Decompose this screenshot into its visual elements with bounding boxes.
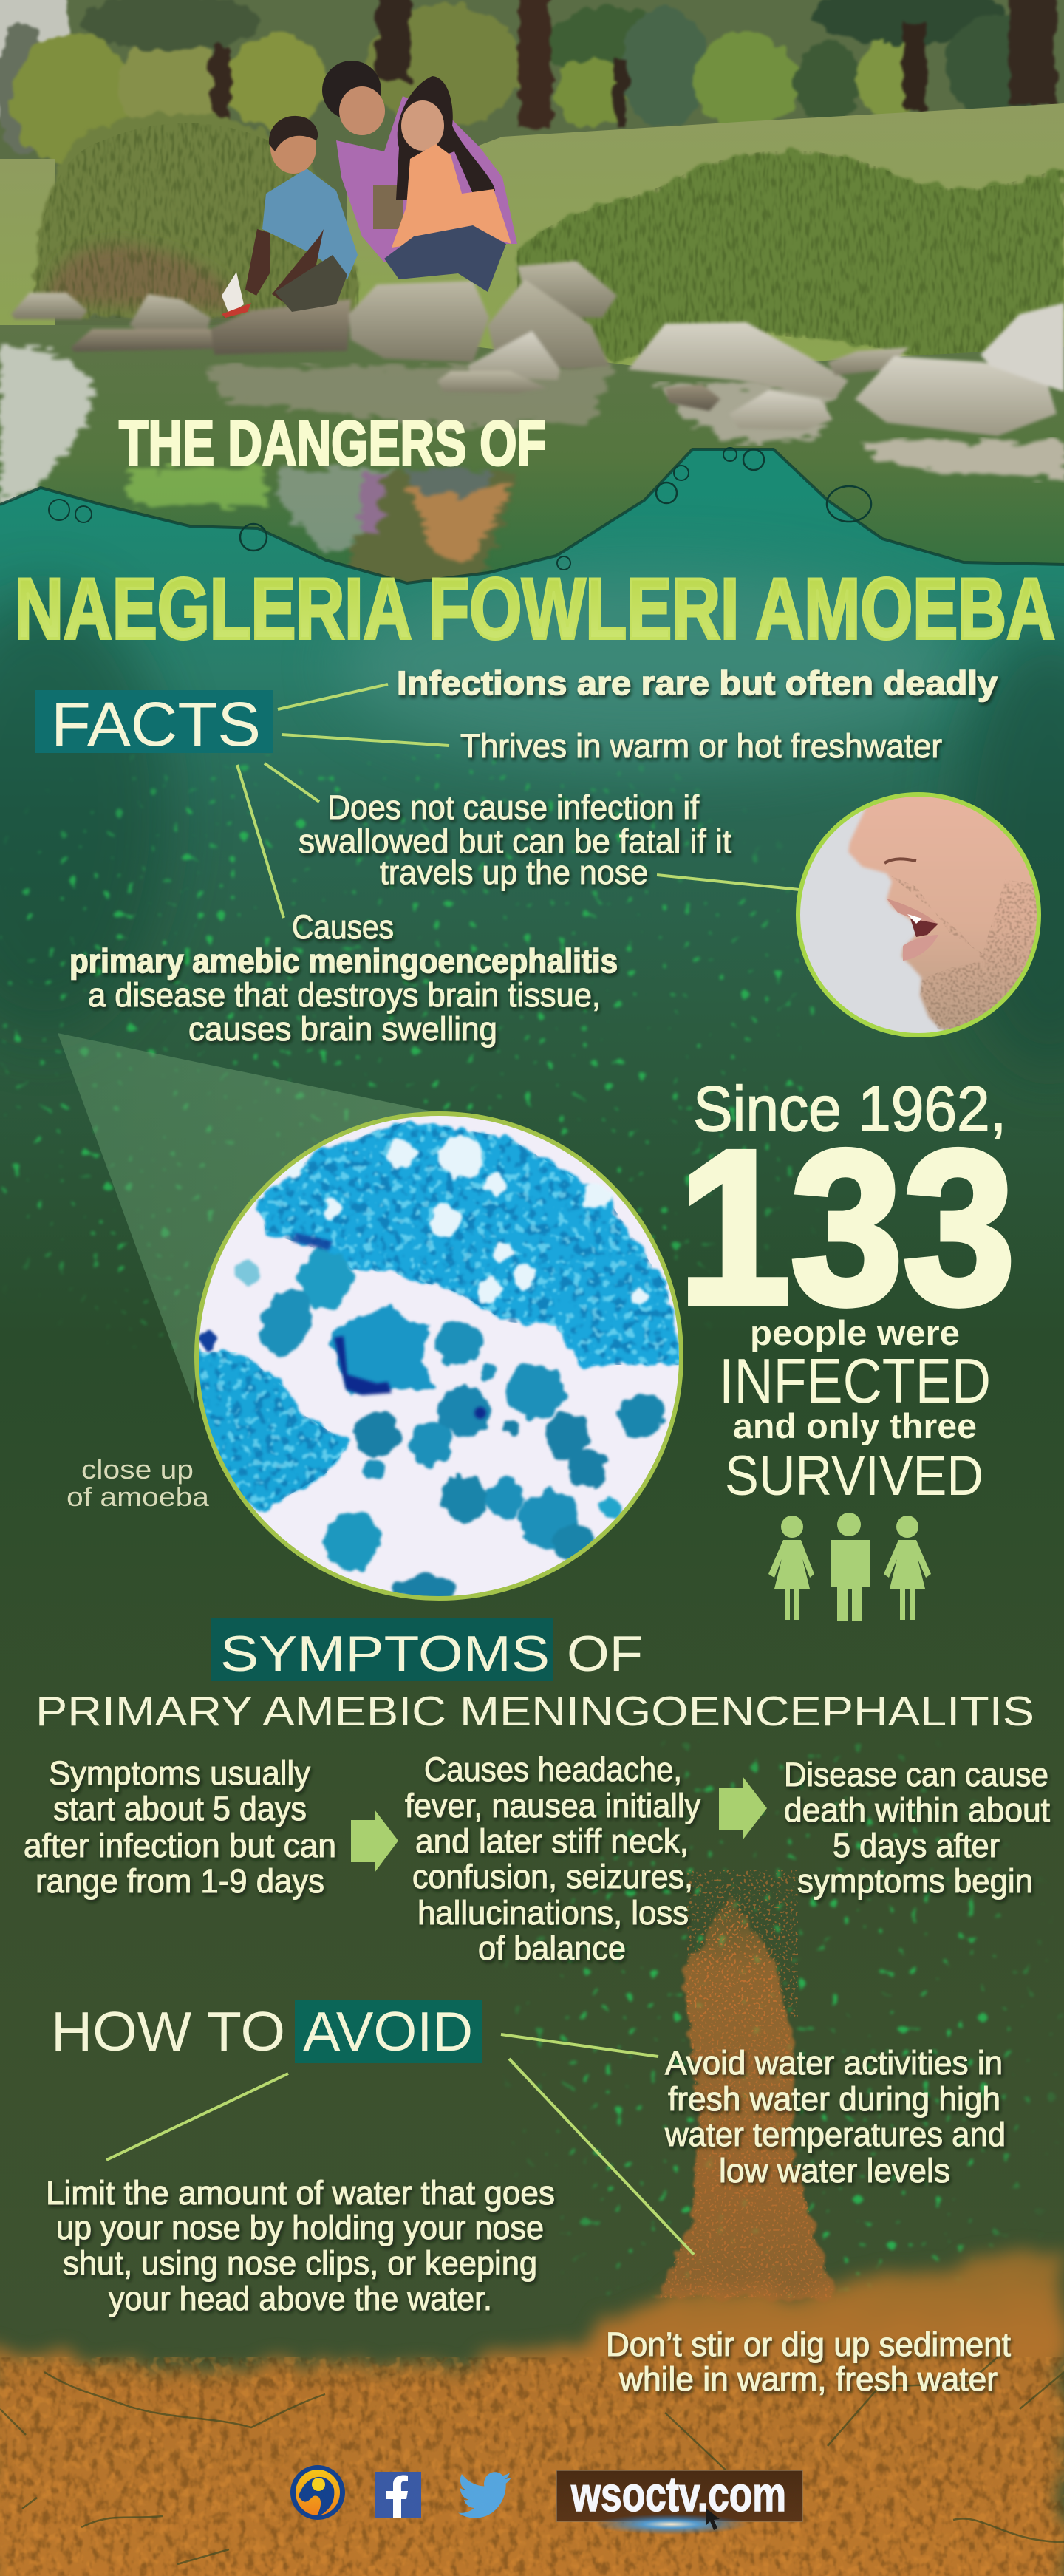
fact: nose: Does not cause infection if	[327, 788, 699, 826]
blue tissue network	[194, 1121, 683, 1510]
symptoms step 3	[784, 1756, 1050, 1900]
dark nuclei	[292, 1233, 486, 1419]
fact: rare but deadly: Infections are rare but often deadly	[397, 664, 998, 702]
tip: water activities: Avoid water activities in	[665, 2044, 1003, 2082]
sediment ground	[0, 2246, 1064, 2576]
reeds right	[517, 151, 1064, 362]
symptoms step 3: symptoms begin	[797, 1862, 1033, 1900]
tip: limit water up nose: your head above the water.	[109, 2280, 492, 2317]
tissue mottling	[194, 1113, 684, 1527]
symptoms step 2: confusion, seizures,	[412, 1858, 693, 1895]
fact: nose: swallowed but can be fatal if it	[299, 822, 732, 860]
icon: facebook	[375, 2472, 421, 2518]
icons: three survivors	[768, 1513, 931, 1621]
heading: how to avoid: AVOID	[303, 2000, 473, 2062]
tip: limit water up nose: Limit the amount of water that goes	[46, 2174, 555, 2212]
caption: close up of amoeba: of amoeba	[66, 1482, 210, 1512]
tip: sediment: Don’t stir or dig up sediment	[606, 2325, 1011, 2363]
sediment texture	[0, 2357, 1064, 2576]
photo: family by the pond	[0, 0, 1064, 591]
symptoms step 2: fever, nausea initially	[405, 1787, 700, 1824]
pale holes in tissue	[285, 1136, 649, 1305]
website badge: wsoctv.com	[570, 2467, 786, 2521]
website badge	[556, 2467, 802, 2535]
symptoms step 3: death within about	[784, 1791, 1050, 1829]
caption: close up of amoeba	[66, 1454, 210, 1512]
tip: sediment: while in warm, fresh water	[618, 2360, 998, 2398]
boy	[222, 116, 358, 318]
reflection of family	[129, 468, 517, 587]
fact: nose: travels up the nose	[380, 853, 648, 891]
tip: limit water up nose: up your nose by holding your nose	[56, 2209, 544, 2246]
heading: primary amebic meningoencephalitis: PRIMARY AMEBIC MENINGOENCEPHALITIS	[35, 1688, 1034, 1735]
tip: limit water up nose: shut, using nose clips, or keeping	[63, 2244, 537, 2282]
statistic: since 1962, 133 infected, three survived: Since 1962,	[693, 1074, 1006, 1145]
pond	[0, 325, 1064, 591]
tree line	[0, 0, 1064, 355]
fact: disease: causes brain swelling	[188, 1010, 497, 1048]
tip: water activities	[664, 2044, 1006, 2190]
title: the dangers of: THE DANGERS OF	[119, 409, 546, 479]
statistic: since 1962, 133 infected, three survived: 133	[678, 1105, 1015, 1349]
icon: channel 9 logo	[290, 2465, 345, 2520]
caption: close up of amoeba: close up	[81, 1454, 194, 1485]
symptoms step 1: Symptoms usually	[49, 1754, 310, 1792]
fact: disease	[69, 908, 618, 1048]
green amoeba speckles	[0, 754, 1064, 2298]
arrow: step 2 to step 3	[719, 1776, 767, 1840]
lawn	[0, 103, 1064, 384]
symptoms step 2: Causes headache,	[424, 1751, 682, 1788]
fact: disease: a disease that destroys brain tissue,	[88, 976, 601, 1014]
heading: how to avoid	[51, 2000, 482, 2063]
tip: limit water up nose	[46, 2174, 555, 2317]
icon: twitter	[458, 2472, 511, 2518]
symptoms step 2	[405, 1751, 700, 1967]
image: nose and mouth profile	[798, 783, 1049, 1038]
tip: water activities: low water levels	[719, 2152, 950, 2190]
symptoms step 2: of balance	[478, 1929, 626, 1967]
heading: symptoms of: OF	[567, 1626, 643, 1682]
statistic: since 1962, 133 infected, three survived: people were	[750, 1313, 960, 1352]
fact: disease: primary amebic meningoencephalitis	[69, 942, 618, 980]
symptoms step 3: Disease can cause	[784, 1756, 1048, 1793]
heading: symptoms of	[211, 1618, 643, 1682]
connector lines: facts	[237, 684, 799, 918]
tip: water activities: water temperatures and	[664, 2116, 1006, 2153]
amoeba cells	[199, 1250, 665, 1602]
tip: sediment	[606, 2325, 1011, 2398]
image: amoeba close up	[194, 1113, 684, 1602]
underwater edge with bubbles	[0, 448, 1064, 583]
statistic: since 1962, 133 infected, three survived: SURVIVED	[725, 1445, 983, 1507]
symptoms step 1: start about 5 days	[53, 1790, 307, 1827]
symptoms step 3: 5 days after	[833, 1827, 1000, 1864]
magnifier beam	[58, 1033, 436, 1404]
statistic: since 1962, 133 infected, three survived: and only three	[733, 1406, 977, 1445]
sediment plume	[658, 1870, 842, 2306]
panel: facts heading: FACTS	[51, 689, 261, 759]
fact: warm freshwater: Thrives in warm or hot freshwater	[460, 727, 942, 765]
arrow: step 1 to step 2	[351, 1810, 398, 1873]
rocks	[11, 261, 1064, 436]
fact: nose	[299, 788, 732, 891]
girl	[384, 76, 511, 292]
symptoms step 1	[24, 1754, 336, 1900]
icon: woman	[768, 1516, 814, 1620]
heading: how to avoid: HOW TO	[51, 2000, 285, 2062]
statistic: since 1962, 133 infected, three survived	[678, 1074, 1015, 1507]
icon: woman	[884, 1516, 931, 1620]
reeds left	[33, 114, 359, 318]
mother	[322, 61, 517, 262]
symptoms step 1: after infection but can	[24, 1827, 336, 1864]
symptoms step 2: and later stiff neck,	[415, 1822, 689, 1860]
statistic: since 1962, 133 infected, three survived: INFECTED	[719, 1346, 991, 1417]
sediment cracks	[0, 2357, 1064, 2564]
symptoms step 1: range from 1-9 days	[35, 1862, 324, 1900]
connector lines: avoid	[106, 2034, 694, 2255]
symptoms step 2: hallucinations, loss	[417, 1894, 689, 1932]
tip: water activities: fresh water during high	[668, 2080, 1000, 2118]
icon: man	[831, 1513, 870, 1621]
heading: symptoms of: SYMPTOMS	[220, 1626, 550, 1682]
fact: disease: Causes	[292, 908, 394, 946]
